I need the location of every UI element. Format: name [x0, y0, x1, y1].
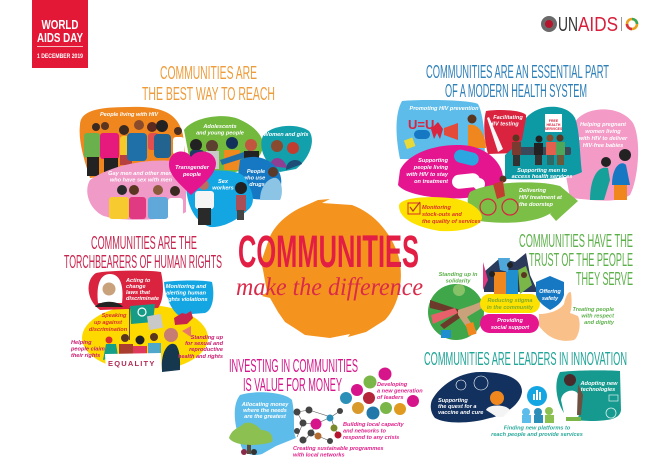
icon: offering safety shield: Offering [539, 289, 561, 295]
blob: people who use drugs: People [247, 169, 265, 175]
heading: torchbearers of human rights [64, 232, 222, 272]
blob: supporting men to access health services [505, 107, 582, 180]
banner: equality [105, 353, 162, 372]
label: standing up in solidarity: solidarity [446, 278, 471, 284]
label: building local capacity: respond to any crisis [343, 435, 399, 441]
blob: helping pregnant women: women living [585, 129, 621, 135]
blob: allocating money: are the greatest [244, 414, 287, 420]
label: standing up for sexual and reproductive health [178, 335, 224, 360]
blob: supporting men to access health services: access health services [512, 174, 572, 180]
label: helping people claim their rights: Helping [71, 340, 92, 346]
label: finding new platforms: Finding new platforms to [504, 426, 571, 432]
blob: supporting men to access health services: SERVICES [545, 127, 563, 131]
blob: monitoring stock-outs [399, 197, 482, 231]
icon: tree [229, 423, 273, 455]
logo: UNAIDS [541, 14, 637, 36]
blob: sex workers: Sex [218, 179, 229, 185]
label: developing a new generation of leaders: of leaders [377, 395, 403, 401]
icon: transgender people heart: people [182, 172, 201, 178]
heading: modern health system [426, 61, 609, 101]
label: building local capacity: and networks to [343, 428, 386, 434]
label: standing up for sexual and reproductive health: health and rights [178, 354, 223, 360]
panel: populations reached [80, 107, 312, 227]
logo: UNAIDS: UN [558, 14, 578, 36]
blob: monitoring stock-outs: stock-outs and [422, 212, 462, 218]
blob: delivering HIV treatment at the doorstep: HIV treatment at [519, 195, 563, 201]
blob: yellow equality field: discrimination [89, 327, 128, 333]
blob: adolescents and young people: and young people [196, 130, 244, 136]
blob: delivering HIV treatment at the doorstep [468, 176, 578, 223]
blob: helping pregnant women: Helping pregnant [580, 122, 627, 128]
blob: sex workers [186, 170, 253, 227]
heading: best way to reach: THE BEST WAY TO REACH [142, 83, 275, 104]
blob: delivering HIV treatment at the doorstep: the doorstep [519, 202, 553, 208]
blob: supporting men to access health services: HEALTH [547, 123, 561, 127]
blob: supporting people living with HIV to stay on treatment: with HIV to stay [406, 172, 449, 178]
label: standing up in solidarity [439, 272, 478, 284]
blob: facilitating HIV testing [484, 110, 526, 154]
badge: World AIDS Day: WORLD [42, 17, 78, 32]
icon: transgender people heart [169, 151, 216, 195]
heading: torchbearers of human rights: COMMUNITIES ARE THE [91, 232, 197, 253]
blob: supporting the quest: vaccine and cure [438, 410, 483, 416]
heading: best way to reach [142, 62, 275, 104]
blob: people who use drugs: drugs [249, 182, 265, 188]
pill: providing social support [480, 314, 539, 333]
blob: monitoring stock-outs: the quality of services [422, 219, 481, 225]
blob: people who use drugs: who use [243, 176, 265, 182]
blob: monitoring and alerting: alerting human [166, 290, 207, 296]
blob: gay men and other men who have sex with men: who have sex with men [110, 178, 173, 184]
blob: monitoring and alerting: Monitoring and [166, 284, 207, 290]
label: standing up in solidarity: Standing up in [439, 272, 478, 278]
label: developing a new generation of leaders: Developing [377, 382, 408, 388]
icon: blue circle chart [527, 386, 547, 406]
blob: acting to change laws: Acting to [125, 278, 151, 284]
blob: allocating money [235, 392, 296, 455]
blob: helping pregnant women: HIV-free babies [583, 143, 623, 149]
blob: facilitating HIV testing: Facilitating [493, 115, 523, 121]
icon: people with speech [522, 407, 554, 423]
icon: offering safety shield [536, 276, 564, 310]
panel: trust [428, 253, 615, 341]
blob: supporting people living with HIV to stay on treatment [398, 145, 503, 198]
blob: supporting people living with HIV to stay on treatment: Supporting [418, 158, 449, 164]
icon: transgender people heart: Transgender [175, 165, 210, 171]
heading: investing in communities [229, 355, 358, 395]
blob: adolescents and young people [184, 116, 263, 173]
centre title: communities make the difference: make the difference [236, 274, 423, 301]
blob: monitoring stock-outs: Monitoring [422, 205, 451, 211]
label: helping people claim their rights: their rights [71, 353, 100, 359]
text: INVESTING IN COMMUNITIES [229, 355, 358, 376]
blob: helping pregnant women [565, 109, 638, 201]
blob: supporting the quest: the quest for a [438, 404, 477, 410]
blob: promoting HIV prevention: U=U [408, 117, 434, 132]
blob: people living with HIV [80, 107, 186, 178]
pill: providing social support: social support [491, 325, 530, 331]
banner: equality: EQUALITY [108, 359, 156, 368]
icon: crowd [483, 253, 538, 294]
label: finding new platforms [491, 426, 583, 438]
blob: supporting the quest [431, 372, 522, 422]
blob: adolescents and young people: Adolescents [202, 124, 237, 130]
icon: flag and crowd [103, 304, 191, 372]
blob: supporting people living with HIV to stay on treatment: people living [413, 165, 449, 171]
label: helping people claim their rights: people claim [70, 346, 105, 352]
blob: people who use drugs [238, 157, 282, 200]
blob: supporting men to access health services: Supporting men to [517, 168, 567, 174]
heading: investing in communities: IS VALUE FOR MONEY [243, 374, 342, 395]
heading: trust of the people [519, 230, 633, 289]
label: creating sustainable programmes: Creating sustainable programmes [293, 446, 383, 452]
label: developing a new generation of leaders: a new generation [377, 388, 423, 394]
logo: UNAIDS: AIDS [578, 14, 618, 36]
label: standing up for sexual and reproductive health: Standing up [191, 335, 224, 341]
badge: World AIDS Day [32, 0, 88, 68]
icon: offering safety shield: safety [542, 296, 559, 302]
label: creating sustainable programmes: with local networks [293, 452, 345, 458]
blob: helping pregnant women: with HIV to deliver [579, 136, 628, 142]
pill: reducing stigma: Reducing stigma [487, 298, 533, 304]
label: standing up for sexual and reproductive health: for sexual and [185, 341, 224, 347]
panel: human rights [70, 271, 224, 372]
blob: supporting the quest: Supporting [438, 398, 468, 404]
blob: yellow equality field [82, 305, 208, 371]
text: TORCHBEARERS OF HUMAN RIGHTS [64, 251, 222, 272]
blob: sex workers: workers [212, 186, 234, 192]
blob: supporting people living with HIV to stay on treatment: on treatment [414, 179, 449, 185]
badge: World AIDS Day: AIDS DAY [37, 30, 83, 45]
blob: acting to change laws: laws that [126, 290, 151, 296]
icon: thumbs up [539, 292, 580, 341]
icons: new generation of leaders [340, 368, 419, 420]
blob: acting to change laws [89, 271, 163, 310]
icon: joined hands circle [428, 284, 487, 340]
blob: monitoring and alerting [164, 280, 213, 325]
blob: allocating money: where the needs [243, 408, 287, 414]
blob: women and girls [261, 126, 312, 172]
blob: acting to change laws: change [126, 284, 146, 290]
centre title: communities make the difference [236, 226, 423, 301]
diagram: network [294, 406, 343, 444]
blob: yellow equality field: up against [94, 320, 123, 326]
badge: World AIDS Day: 1 DECEMBER 2019 [37, 53, 83, 60]
label: developing a new generation of leaders [377, 382, 423, 401]
blob: promoting HIV prevention: Promoting HIV prevention [410, 106, 479, 112]
blob: adopting new technologies: Adopting new [580, 381, 618, 387]
pill: providing social support: Providing [497, 318, 523, 324]
blob: women and girls: Women and girls [264, 132, 308, 138]
label: treating people with respect: Treating people [572, 307, 614, 313]
pill: reducing stigma: in the community [487, 305, 534, 311]
label: treating people with respect: with respect [581, 314, 615, 320]
panel: innovation [431, 370, 621, 438]
blob: acting to change laws: discriminate [126, 296, 159, 302]
blob: supporting men to access health services: FREE [549, 119, 559, 123]
heading: best way to reach: COMMUNITIES ARE [160, 62, 257, 83]
pill: reducing stigma [480, 294, 540, 313]
label: building local capacity: Building local capacity [343, 422, 405, 428]
blob: delivering HIV treatment at the doorstep: Delivering [519, 188, 547, 194]
blob: allocating money: Allocating money [241, 402, 289, 408]
label: building local capacity [343, 422, 405, 441]
panel: modern health system [396, 100, 638, 231]
blob: gay men and other men who have sex with men [87, 161, 186, 220]
blob: adopting new technologies: technologies [581, 387, 615, 393]
blob: yellow equality field: Speaking [102, 313, 127, 319]
blob: monitoring and alerting: rights violations [164, 297, 208, 303]
label: treating people with respect: and dignity [584, 320, 615, 326]
centre title: communities make the difference: COMMUNITIES [238, 226, 419, 277]
blob: facilitating HIV testing: HIV testing [489, 122, 519, 128]
panel: value for money [229, 368, 423, 458]
blob: promoting HIV prevention [396, 100, 486, 160]
label: standing up for sexual and reproductive health: reproductive [189, 347, 223, 353]
label: treating people with respect [572, 307, 615, 326]
label: finding new platforms: reach people and provide services [491, 432, 583, 438]
blob: adopting new technologies [556, 370, 621, 421]
centre: orange brush circle [261, 199, 401, 338]
label: creating sustainable programmes [293, 446, 383, 458]
label: helping people claim their rights [70, 340, 105, 359]
blob: people living with HIV: People living with HIV [100, 112, 159, 118]
blob: gay men and other men who have sex with men: Gay men and other men [108, 171, 172, 177]
